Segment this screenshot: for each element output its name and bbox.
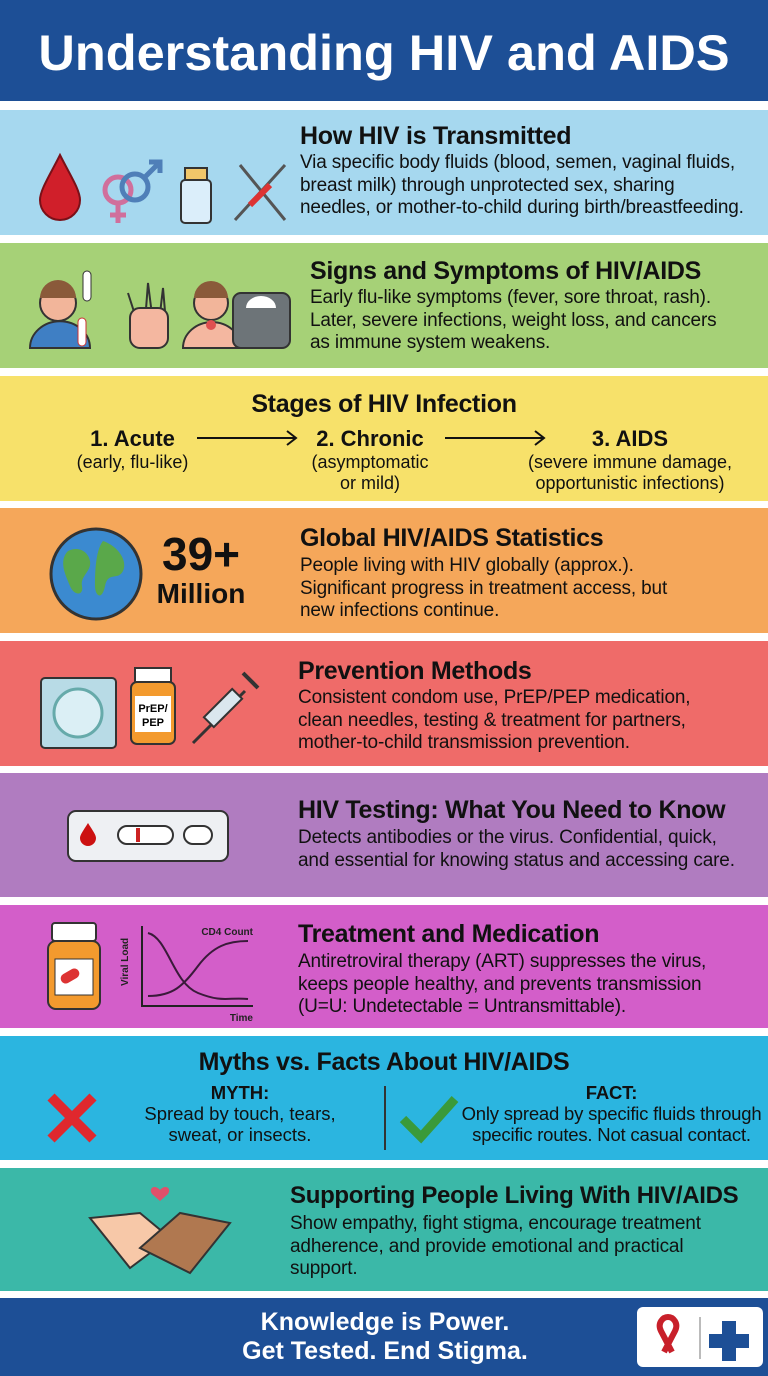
text [290, 1213, 701, 1279]
panel: testing [0, 773, 768, 897]
stage 3: (severe immune damage, [528, 452, 732, 472]
text: Show empathy, fight stigma, encourage treatment [290, 1213, 701, 1234]
footer [0, 1298, 768, 1376]
heading: Stages of HIV Infection [251, 390, 517, 418]
text: Later, severe infections, weight loss, and cancers [310, 310, 717, 330]
fact [462, 1082, 761, 1145]
big number [157, 528, 245, 609]
icons: condom, pill bottle, syringe [40, 667, 260, 749]
big number: 39+ [162, 528, 240, 580]
text: needles, or mother-to-child during birth/breastfeeding. [300, 197, 744, 218]
text [298, 951, 706, 1017]
heading: HIV Testing: What You Need to Know [298, 796, 725, 824]
icon: green check [400, 1096, 458, 1144]
text: clean needles, testing & treatment for partners, [298, 710, 686, 730]
icon: red X [48, 1094, 96, 1142]
panel: statistics [0, 508, 768, 633]
slogan [242, 1308, 528, 1365]
myth: sweat, or insects. [169, 1124, 311, 1145]
stage 1 [77, 426, 188, 472]
icon: globe [50, 528, 142, 620]
heading: Supporting People Living With HIV/AIDS [290, 1182, 738, 1209]
chart: viral load vs CD4: Time [230, 1013, 253, 1024]
text: People living with HIV globally (approx.). [300, 555, 634, 576]
text [310, 287, 717, 353]
stage 1: 1. Acute [90, 426, 175, 451]
stage 2 [311, 426, 429, 493]
stage 3 [528, 426, 732, 493]
text [300, 555, 668, 621]
stage 2: or mild) [340, 473, 400, 493]
panel: support [0, 1168, 768, 1291]
text: Antiretroviral therapy (ART) suppresses the virus, [298, 951, 706, 972]
panel: prevention [0, 641, 768, 766]
text: new infections continue. [300, 600, 499, 621]
text: as immune system weakens. [310, 332, 550, 353]
title banner [0, 0, 768, 101]
text: Detects antibodies or the virus. Confidential, quick, [298, 827, 717, 848]
heading: Treatment and Medication [298, 920, 599, 948]
logo badge [637, 1307, 763, 1367]
text: support. [290, 1258, 357, 1279]
icons: sick people, rash, scale [29, 270, 291, 349]
chart: viral load vs CD4: Viral Load [120, 938, 131, 986]
myth: Spread by touch, tears, [144, 1103, 336, 1124]
panel: transmission [0, 110, 768, 235]
arrow 2 [445, 430, 546, 446]
chart: viral load vs CD4: CD4 Count [201, 927, 254, 938]
text [298, 827, 735, 870]
icons: blood, gender, bottle, syringes [39, 152, 286, 224]
myth [144, 1082, 336, 1145]
arrow 1 [197, 430, 298, 446]
text: mother-to-child transmission prevention. [298, 732, 630, 753]
heading: How HIV is Transmitted [300, 122, 571, 150]
text: adherence, and provide emotional and practical [290, 1236, 683, 1256]
chart: viral load vs CD4 [120, 926, 254, 1024]
heading: Global HIV/AIDS Statistics [300, 524, 603, 552]
icons: condom, pill bottle, syringe: PEP [142, 717, 164, 729]
text: and essential for knowing status and accessing care. [298, 850, 735, 870]
panel: stages [0, 376, 768, 501]
text: Early flu-like symptoms (fever, sore throat, rash). [310, 287, 711, 308]
stage 2: (asymptomatic [311, 452, 429, 472]
text: (U=U: Undetectable = Untransmittable). [298, 996, 626, 1017]
text [300, 152, 744, 218]
text [298, 687, 690, 753]
slogan: Get Tested. End Stigma. [242, 1337, 528, 1365]
text: keeps people healthy, and prevents transmission [298, 974, 701, 994]
fact: FACT: [586, 1082, 637, 1103]
stage 2: 2. Chronic [316, 426, 424, 451]
icon: medicine bottle [47, 922, 101, 1010]
stage 1: (early, flu-like) [77, 452, 188, 472]
icon: test kit [67, 810, 229, 862]
heading: Myths vs. Facts About HIV/AIDS [199, 1048, 569, 1076]
text: breast milk) through unprotected sex, sharing [300, 174, 675, 196]
fact: specific routes. Not casual contact. [472, 1124, 751, 1145]
heading: Signs and Symptoms of HIV/AIDS [310, 257, 701, 285]
big number: Million [157, 578, 245, 609]
stage 3: 3. AIDS [592, 426, 668, 451]
panel: treatment [0, 905, 768, 1028]
divider [384, 1086, 386, 1150]
text: Via specific body fluids (blood, semen, vaginal fluids, [300, 152, 735, 173]
text: Significant progress in treatment access, but [300, 578, 667, 598]
text: Consistent condom use, PrEP/PEP medication, [298, 687, 690, 708]
icons: condom, pill bottle, syringe: PrEP/ [138, 703, 168, 715]
heading: Prevention Methods [298, 657, 532, 685]
panel: myths vs facts [0, 1036, 768, 1160]
stage 3: opportunistic infections) [535, 473, 725, 493]
fact: Only spread by specific fluids through [462, 1103, 761, 1124]
icon: handshake with heart [88, 1187, 232, 1274]
slogan: Knowledge is Power. [261, 1308, 509, 1336]
myth: MYTH: [211, 1082, 269, 1103]
panel: symptoms [0, 243, 768, 368]
title: Understanding HIV and AIDS [38, 24, 730, 81]
